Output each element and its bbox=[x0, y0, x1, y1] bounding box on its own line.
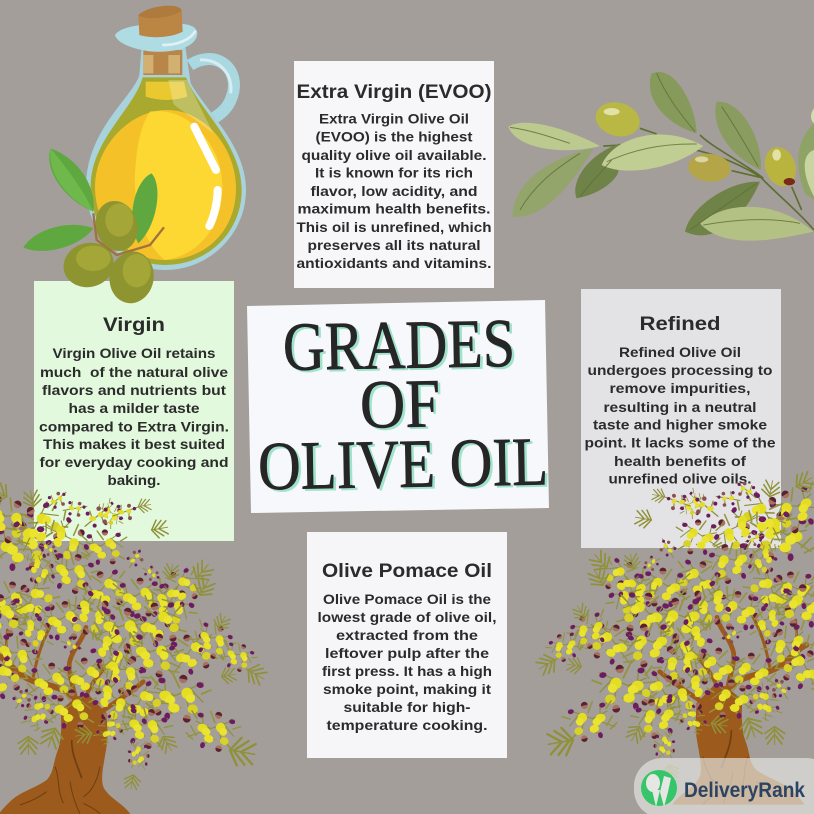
text block: Virgin description: baking. bbox=[108, 473, 160, 488]
text block: Pomace description: temperature cooking. bbox=[326, 718, 488, 733]
text block: Refined description: resulting in a neutral bbox=[604, 400, 756, 415]
heading: Refined: Refined bbox=[640, 313, 720, 335]
title panel: Grades of Olive Oil bbox=[247, 300, 551, 513]
heading: Extra Virgin (EVOO): Extra Virgin (EVOO) bbox=[296, 81, 492, 103]
title text: OF bbox=[359, 365, 441, 443]
title shadow bbox=[258, 306, 551, 506]
text block: Pomace description: leftover pulp after the bbox=[325, 646, 490, 661]
title shadow: OF bbox=[362, 367, 443, 445]
text block: Refined description bbox=[584, 345, 776, 486]
panel: Virgin bbox=[34, 281, 234, 541]
illustration: right olive tree bbox=[534, 469, 814, 805]
icon: olive oil jug with olives bbox=[23, 6, 246, 307]
text block: Pomace description bbox=[318, 592, 496, 733]
text block: Refined description: taste and higher smoke bbox=[593, 418, 768, 432]
text block: Virgin description: has a milder taste bbox=[68, 401, 200, 416]
text block: Virgin description: This makes it best suited bbox=[43, 437, 225, 452]
heading: Olive Pomace Oil: Olive Pomace Oil bbox=[322, 560, 492, 582]
text block: Virgin description bbox=[39, 346, 229, 488]
text block: Refined description: unrefined olive oils. bbox=[608, 472, 752, 486]
wordmark: DeliveryRank bbox=[684, 779, 805, 802]
text block: EVOO description: Extra Virgin Olive Oil bbox=[319, 112, 469, 126]
text block: Virgin description: compared to Extra Virgin. bbox=[39, 420, 229, 434]
text block: Refined description: point. It lacks some of the bbox=[584, 436, 776, 450]
text block: EVOO description: antioxidants and vitamins. bbox=[296, 256, 492, 271]
text block: Refined description: health benefits of bbox=[614, 454, 747, 469]
text block: Pomace description: extracted from the bbox=[336, 628, 479, 643]
text block: Pomace description: Olive Pomace Oil is the bbox=[323, 592, 492, 607]
text block: EVOO description: (EVOO) is the highest bbox=[316, 130, 473, 144]
title text: OLIVE OIL bbox=[257, 423, 549, 504]
text block: EVOO description: preserves all its natural bbox=[308, 238, 480, 253]
text block: EVOO description: maximum health benefits. bbox=[298, 202, 490, 216]
text block: EVOO description bbox=[296, 112, 492, 271]
text block: Pomace description: smoke point, making it bbox=[323, 682, 492, 697]
text block: Virgin description: for everyday cooking and bbox=[40, 455, 228, 470]
text block: Refined description: undergoes processing to bbox=[588, 363, 772, 378]
illustration: olive branch bbox=[508, 72, 814, 241]
text block: Pomace description: first press. It has a high bbox=[322, 664, 492, 679]
panel: Olive Pomace Oil bbox=[307, 532, 507, 758]
text block: Virgin description: Virgin Olive Oil retains bbox=[52, 346, 216, 361]
text block: Virgin description: much of the natural olive bbox=[40, 365, 229, 380]
icon: green circle with spoon and fork bbox=[641, 770, 677, 807]
text block: EVOO description: This oil is unrefined, which bbox=[296, 220, 492, 235]
text block: EVOO description: It is known for its rich bbox=[315, 166, 473, 180]
text block: EVOO description: flavor, low acidity, and bbox=[310, 184, 478, 199]
panel: Extra Virgin (EVOO) bbox=[294, 61, 494, 288]
title shadow: GRADES bbox=[285, 307, 518, 387]
text block: Pomace description: lowest grade of olive oil, bbox=[318, 610, 496, 625]
text block: EVOO description: quality olive oil available. bbox=[302, 148, 486, 163]
title text bbox=[255, 304, 549, 504]
logo: DeliveryRank bbox=[634, 758, 814, 814]
title text: GRADES bbox=[282, 305, 516, 385]
text block: Refined description: Refined Olive Oil bbox=[619, 345, 741, 360]
panel: Refined bbox=[581, 289, 781, 548]
heading: Virgin: Virgin bbox=[103, 314, 165, 336]
illustration: left olive tree bbox=[0, 479, 269, 814]
text block: Virgin description: flavors and nutrients but bbox=[42, 383, 227, 398]
text block: Refined description: remove impurities, bbox=[610, 381, 750, 396]
title shadow: OLIVE OIL bbox=[260, 425, 551, 506]
text block: Pomace description: suitable for high- bbox=[344, 700, 470, 715]
